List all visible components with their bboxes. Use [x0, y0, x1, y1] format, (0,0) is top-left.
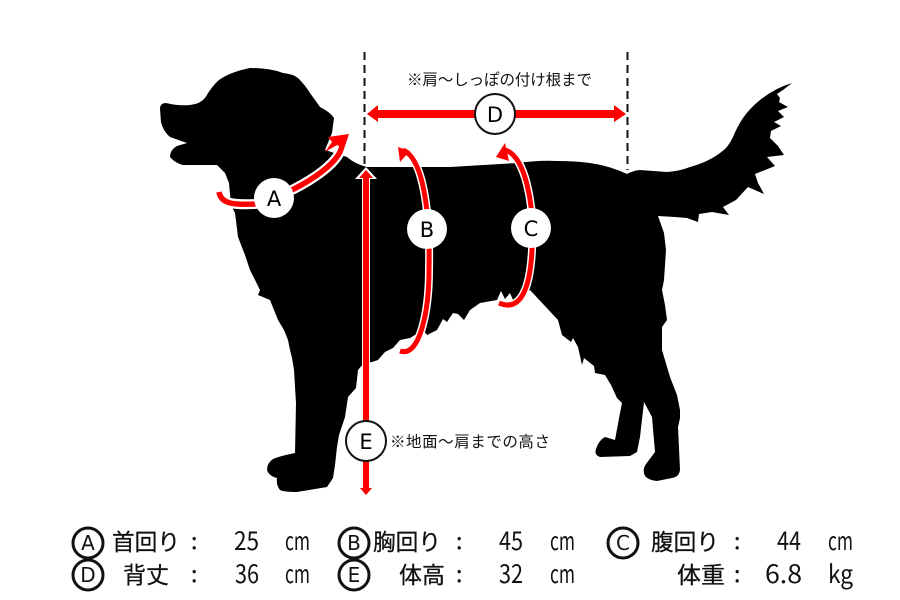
- row: belly C: [608, 522, 853, 558]
- note: shoulder to tail base: ※肩～しっぽの付け根まで: [407, 71, 592, 89]
- row: chest B: [339, 522, 575, 558]
- row: height E: [339, 555, 575, 591]
- row: height E: E: [348, 563, 360, 587]
- row: belly C: cm: [828, 522, 853, 558]
- row: back length D: cm: [285, 555, 310, 591]
- row: neck A: :: [191, 522, 197, 556]
- arrow C: belly: [496, 143, 533, 305]
- note: ground to shoulder height: ※地面～肩までの高さ: [390, 433, 550, 451]
- badge A: A: [267, 187, 282, 211]
- row: height E: cm: [550, 555, 575, 591]
- row: neck A: cm: [285, 522, 310, 558]
- arrow D: back length: [367, 105, 626, 122]
- dashed guide lines: [364, 52, 628, 170]
- row: weight: 体重: [677, 556, 725, 590]
- row: chest B: B: [347, 531, 361, 555]
- badge B: [407, 209, 447, 249]
- row: back length D: :: [191, 555, 197, 589]
- row: weight: :: [734, 555, 740, 589]
- row: chest B: 45: [499, 522, 523, 558]
- row: belly C: 腹回り: [651, 523, 719, 557]
- measurements table: [73, 522, 853, 591]
- row: back length D: D: [80, 563, 96, 587]
- badge B: B: [420, 218, 434, 242]
- row: weight: [677, 555, 853, 591]
- badge D: D: [487, 103, 503, 127]
- row: height E: 体高: [399, 556, 445, 590]
- badge E: E: [359, 430, 373, 454]
- badge C: [511, 208, 551, 248]
- row: belly C: 44: [777, 522, 801, 558]
- row: chest B: :: [456, 522, 462, 556]
- row: neck A: 25: [234, 522, 259, 558]
- row: neck A: [73, 522, 310, 558]
- row: height E: :: [456, 555, 462, 589]
- row: chest B: 胸回り: [373, 523, 441, 557]
- arrow A: neck: [219, 134, 349, 204]
- row: back length D: 36: [235, 555, 259, 591]
- row: chest B: cm: [550, 522, 575, 558]
- row: weight: kg: [828, 555, 853, 591]
- badge C: C: [524, 217, 538, 241]
- arrow E: height: [355, 167, 377, 495]
- badge D: [475, 94, 515, 134]
- row: height E: 32: [499, 555, 523, 591]
- row: back length D: 背丈: [123, 556, 169, 590]
- arrow B: chest: [398, 147, 429, 352]
- row: belly C: :: [734, 522, 740, 556]
- row: neck A: A: [81, 531, 95, 555]
- row: belly C: C: [616, 531, 630, 555]
- badge E: [346, 421, 386, 461]
- row: weight: 6.8: [765, 555, 802, 591]
- badge A: [254, 178, 294, 218]
- row: back length D: [73, 555, 310, 591]
- row: neck A: 首回り: [112, 523, 180, 557]
- dog silhouette: [160, 68, 792, 492]
